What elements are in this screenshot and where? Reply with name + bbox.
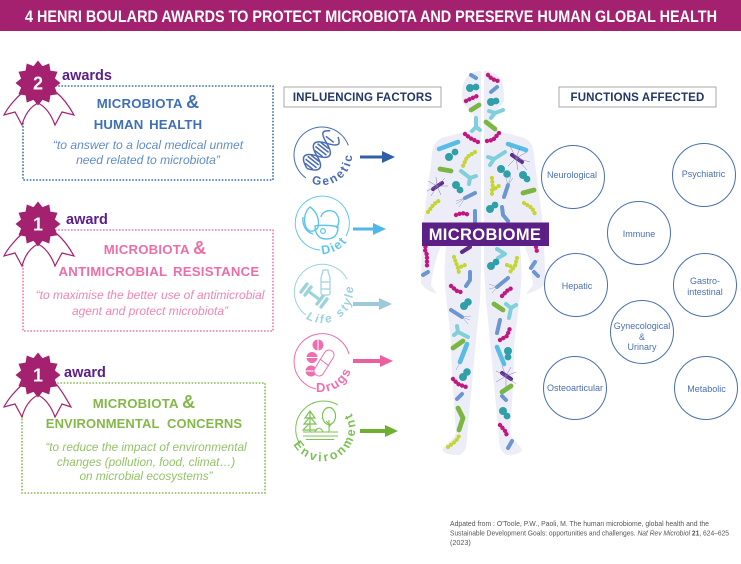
teal blobs — [445, 84, 530, 419]
icon: life style — [294, 264, 354, 324]
icon: rosette award one environment — [4, 352, 71, 417]
arrow: drugs — [353, 355, 393, 367]
arrow: environment — [360, 425, 398, 437]
label: microbiome — [422, 222, 549, 246]
circle: immune — [608, 202, 670, 264]
circle: gynecological and urinary: & — [639, 332, 645, 342]
arrow: diet — [353, 223, 386, 235]
circle: osteoarticular — [544, 356, 606, 420]
icon: environment: Environment — [294, 413, 356, 462]
label: awards: awards — [62, 68, 112, 84]
footnote source: (2023) — [450, 538, 471, 547]
circle: psychiatric: Psychiatric — [682, 169, 726, 179]
label: award: award — [66, 212, 108, 228]
icon: rosette award one — [4, 202, 74, 266]
circle: neurological — [542, 146, 604, 208]
circle: immune: Immune — [623, 229, 655, 239]
label: award environment: award — [64, 365, 106, 381]
heading: influencing factors — [284, 87, 441, 107]
panel: microbiota and antimicrobial resistance — [23, 230, 273, 331]
circle: neurological: Neurological — [547, 170, 597, 180]
icon: rosette award one: 1 — [33, 214, 43, 234]
quote: environmental concerns: “to reduce the impact of environmental — [45, 440, 247, 454]
purple spiky bacteria — [427, 146, 530, 387]
magenta chains — [425, 75, 537, 437]
panel: microbiota and environmental concerns — [22, 383, 265, 493]
heading line 2: antimicrobial resistance: ANTIMICROBIAL RESISTANCE — [59, 264, 259, 279]
circle: gastro-intestinal: Gastro- — [690, 276, 720, 286]
heading line 2: human health: HUMAN HEALTH — [94, 117, 202, 132]
heading: antimicrobial resistance: MICROBIOTA & — [104, 238, 206, 258]
quote: environmental concerns: on microbial ecosystems” — [79, 469, 214, 483]
heading: influencing factors: INFLUENCING FACTORS — [293, 92, 432, 104]
icon: rosette 2 awards — [4, 60, 74, 125]
body silhouette right half — [484, 71, 545, 455]
circle: metabolic — [674, 356, 738, 420]
quote: antimicrobial resistance: agent and protect microbiota” — [72, 304, 229, 318]
icon: diet — [294, 196, 350, 254]
circle: gastro-intestinal — [674, 254, 736, 316]
heading: environmental concerns: MICROBIOTA & — [93, 392, 195, 412]
heading: functions affected — [559, 87, 716, 107]
icon: rosette award one environment: 1 — [33, 366, 43, 386]
quote: human health: need related to microbiota” — [76, 153, 221, 167]
function circles — [542, 144, 738, 420]
icon: genetic — [294, 126, 352, 185]
heading: functions affected: FUNCTIONS AFFECTED — [571, 92, 704, 104]
circle: psychiatric — [672, 144, 736, 206]
circle: gynecological and urinary: Gynecological — [614, 321, 670, 331]
circle: osteoarticular: Osteoarticular — [547, 383, 603, 393]
arrow: genetic — [360, 151, 395, 163]
quote: environmental concerns: changes (pollution, food, climat…) — [57, 455, 235, 469]
quote: antimicrobial resistance: “to maximise the better use of antimicrobial — [36, 288, 264, 302]
heading line 2: environmental concerns: ENVIRONMENTAL CONCERNS — [46, 416, 242, 431]
title banner — [0, 0, 741, 31]
icon: genetic: Genetic — [312, 155, 352, 185]
circle: hepatic: Hepatic — [562, 281, 593, 291]
icon: rosette 2 awards: 2 — [33, 74, 43, 94]
circle: gastro-intestinal: intestinal — [687, 287, 723, 297]
green rods — [440, 105, 534, 430]
circle: hepatic — [544, 254, 608, 316]
quote: human health: “to answer to a local medical unmet — [53, 138, 243, 152]
circle: gynecological and urinary: Urinary — [627, 342, 657, 352]
icon: drugs: Drugs — [316, 370, 350, 392]
circle: metabolic: Metabolic — [687, 384, 726, 394]
icon: diet: Diet — [321, 238, 347, 254]
label: microbiome: MICROBIOME — [429, 226, 541, 244]
icon: life style: Life style — [306, 287, 354, 324]
circle: gynecological and urinary — [610, 300, 674, 364]
teal y shapes — [454, 110, 516, 337]
arrow: life style — [353, 298, 392, 310]
bacteria flagella — [456, 176, 538, 370]
slate blue rods — [423, 75, 538, 448]
body silhouette left half — [421, 71, 481, 455]
heading: human health: MICROBIOTA & — [97, 92, 199, 112]
footnote source: Adpated from : O'Toole, P.W., Paoli, M. The human microbiome, global health and the — [450, 519, 709, 528]
sky blue rods — [439, 142, 526, 364]
yellow chains — [428, 152, 535, 447]
icon: drugs — [294, 333, 350, 392]
human body with microbes — [421, 71, 549, 455]
panel: microbiota and human health — [23, 86, 273, 180]
footnote source: Sustainable Development Goals: opportunities and challenges. Nat Rev Microbiol 21, 624–625 — [450, 528, 731, 538]
